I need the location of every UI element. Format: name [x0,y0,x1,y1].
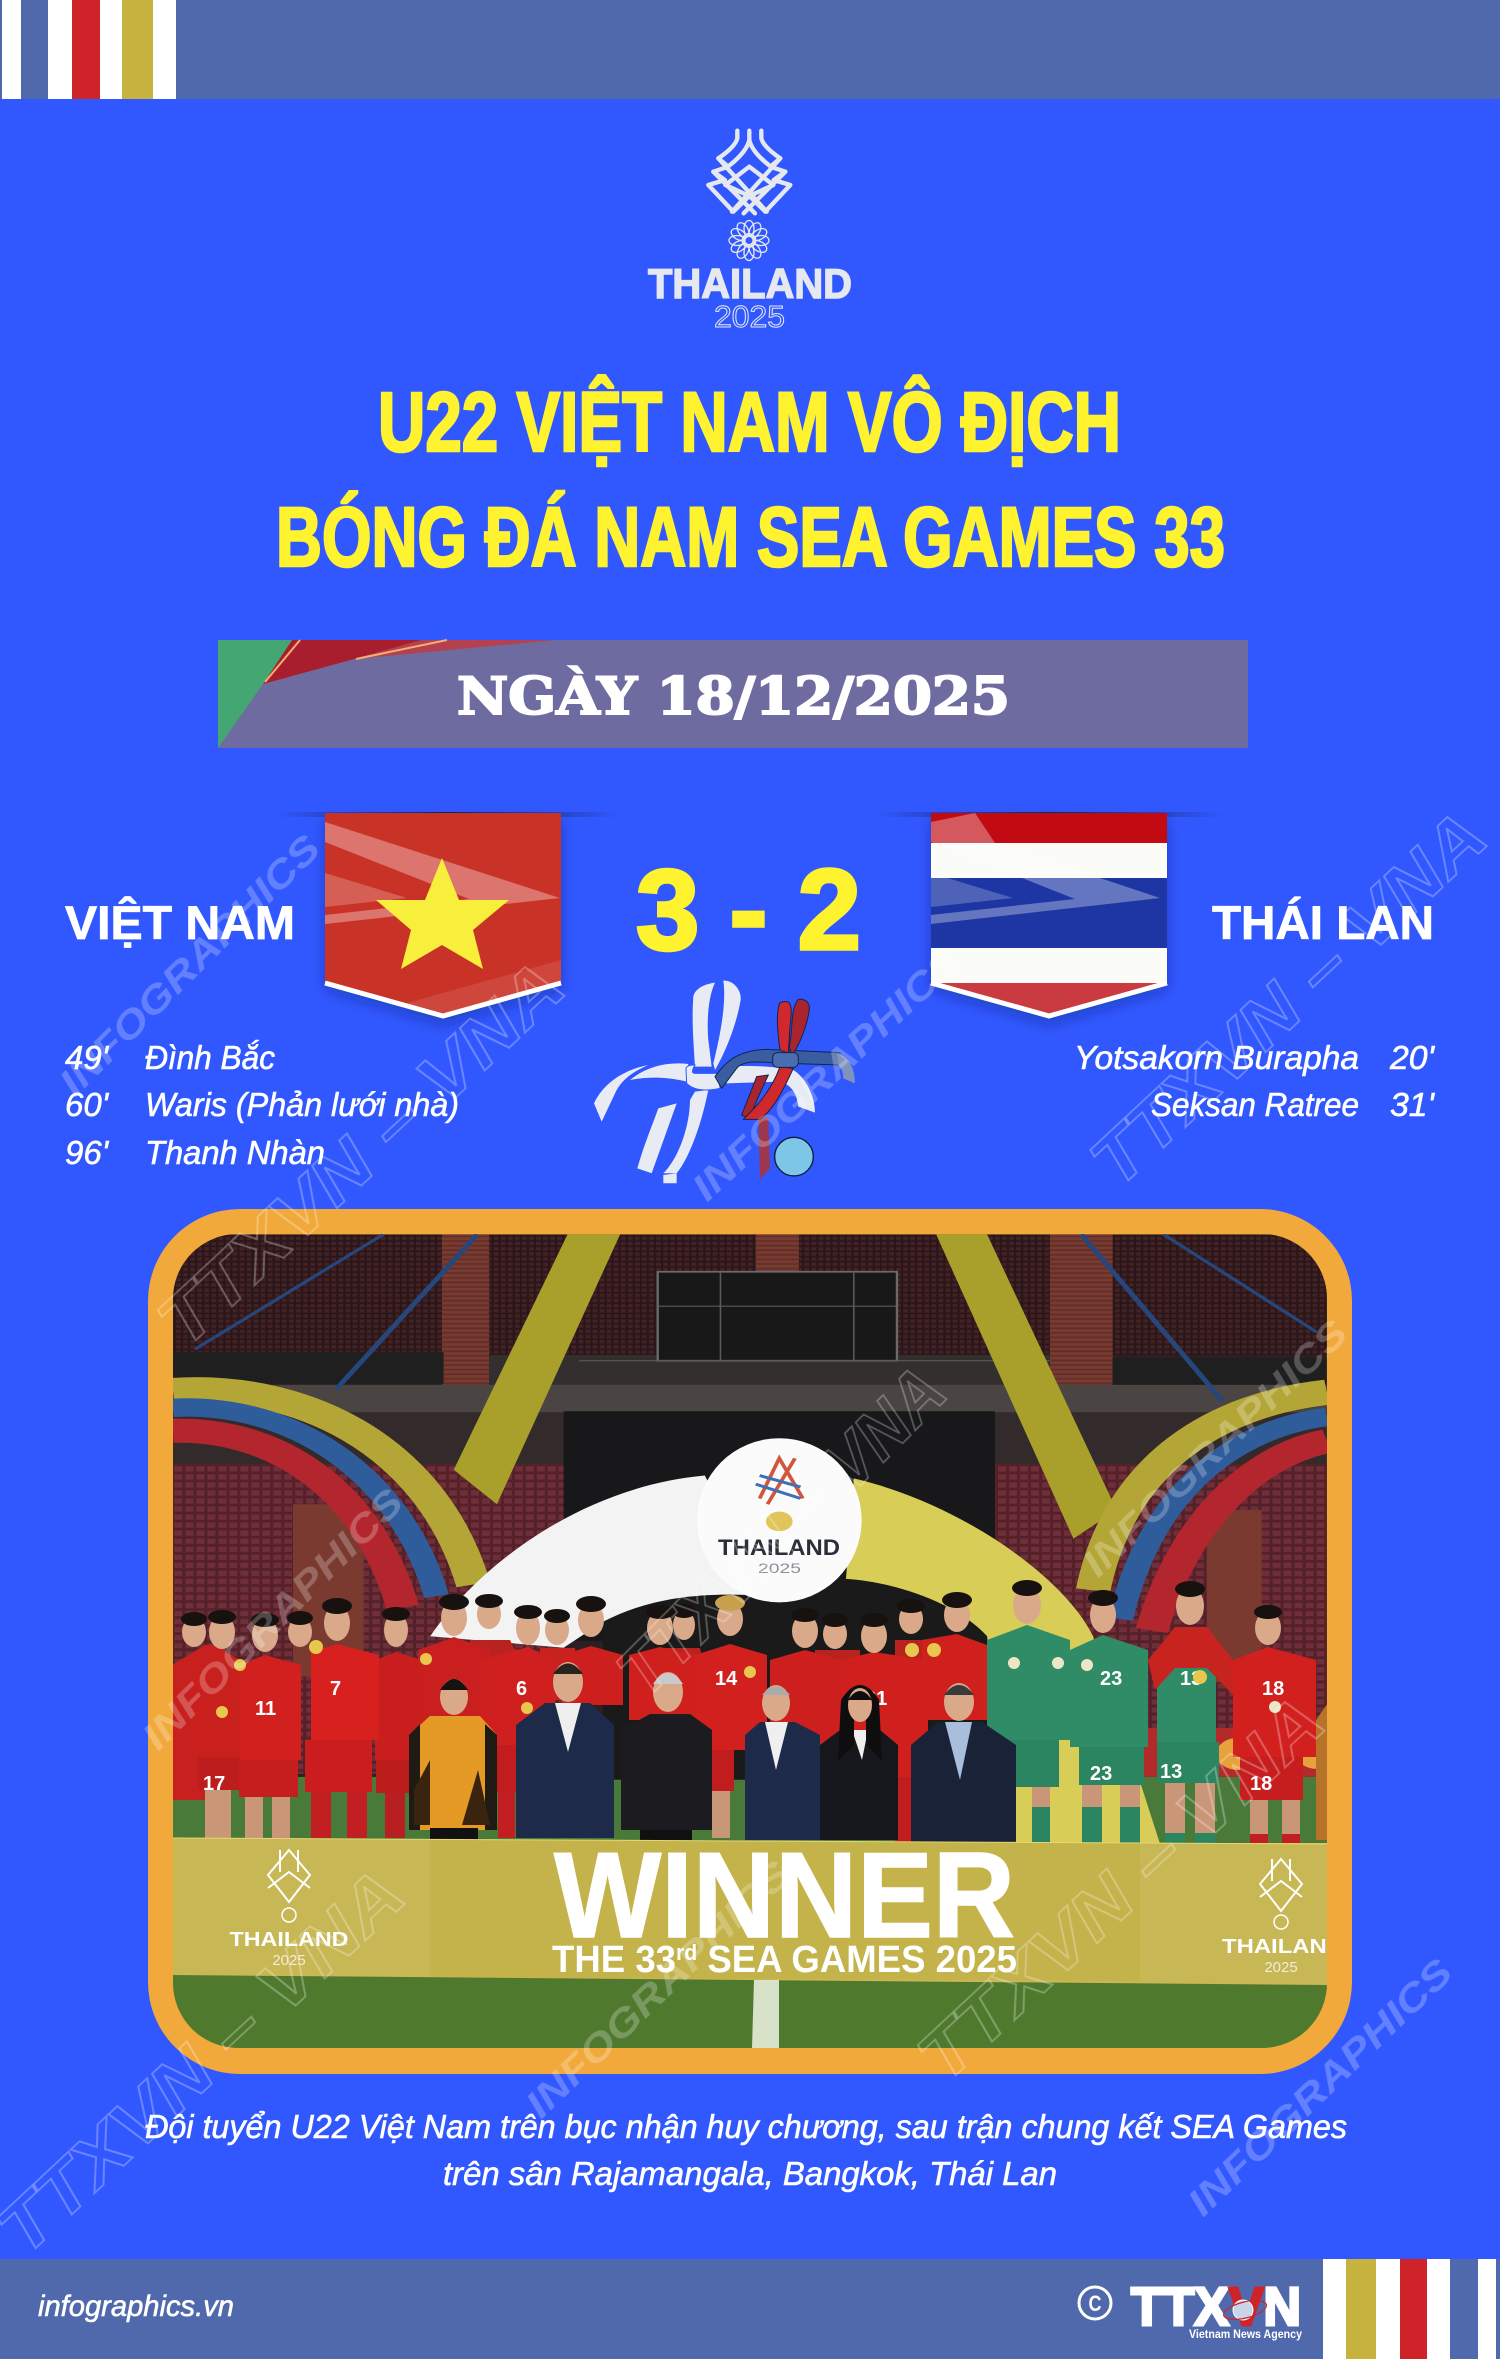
goals: Việt Nam: 96' [65,1134,110,1171]
goalkeepers and players right [987,1580,1330,1843]
title: U22 VIỆT NAM VÔ ĐỊCH [378,375,1121,469]
caption: Đội tuyển U22 Việt Nam trên bục nhận huy chương, sau trận chung kết SEA Games [145,2108,1347,2145]
medals [216,1640,941,1718]
banner logo left: 2025 [272,1952,306,1969]
goals: Việt Nam: Đình Bắc [145,1039,275,1076]
watermarks: INFOGRAPHICS [52,827,329,1104]
footer band with stripes [0,2259,1500,2359]
keeper numbers [1090,1668,1284,1795]
watermarks: TTXVN – VNA [1075,796,1500,1201]
stadium background [173,1234,1337,1843]
banner headline: WINNER [554,1827,1015,1963]
logo year: 2025 [714,299,785,334]
caption [145,2108,1347,2192]
jersey numbers: 6 [516,1678,527,1700]
jersey numbers: 17 [203,1773,225,1795]
watermarks: TTXVN – VNA [902,1681,1339,2096]
banner subheading: rd [676,1940,697,1965]
goals: Việt Nam: Waris (Phản lưới nhà) [145,1086,459,1123]
goals: Thái Lan: 31' [1390,1086,1436,1123]
banner logo right: THAILAND [1222,1936,1344,1958]
caption: trên sân Rajamangala, Bangkok, Thái Lan [443,2155,1057,2192]
goals: Việt Nam: 60' [65,1086,110,1123]
keeper numbers: 13 [1180,1668,1202,1690]
goals: Thái Lan: Yotsakorn Burapha [1074,1039,1359,1076]
date text: NGÀY 18/12/2025 [457,667,1010,727]
stage logo year: 2025 [758,1560,801,1576]
header band with stripes [0,0,1500,99]
goals: Thái Lan: Seksan Ratree [1151,1086,1359,1123]
logo flower [729,220,769,260]
jersey numbers: 14 [715,1668,738,1690]
jersey numbers: 21 [865,1688,887,1710]
keeper numbers: 18 [1262,1678,1284,1700]
goals: Thái Lan: 20' [1389,1039,1436,1076]
goals: Việt Nam: 49' [65,1039,110,1076]
watermarks: INFOGRAPHICS [135,1481,412,1758]
footer TTXVN logo: Vietnam News Agency [1189,2329,1303,2341]
star [376,858,509,969]
footer TTXVN logo: C [1088,2291,1102,2316]
banner logo left: THAILAND [230,1929,348,1951]
jersey numbers [203,1668,887,1795]
logo: Thailand 2025 [648,131,852,334]
title [276,375,1225,584]
jersey numbers: 11 [255,1698,276,1720]
logo wordmark: THAILAND [648,260,852,307]
icon: ribbons and ball [594,981,855,1183]
banner subheading: THE 33 [552,1939,681,1981]
team: Thái Lan name: THÁI LAN [1212,896,1434,949]
goals: Việt Nam: Thanh Nhàn [145,1134,325,1171]
winner banner [173,1827,1344,1985]
date banner [218,640,1248,748]
watermarks: INFOGRAPHICS [1180,1951,1461,2224]
footer TTXVN logo: TTXVN [1131,2277,1301,2337]
flag pennant: Thailand [876,812,1225,1018]
back row players [172,1594,935,1800]
photo: team on the podium [172,1234,1344,2048]
officials [409,1662,1016,1842]
watermarks: TTXVN – VNA [601,1351,961,1711]
logo lattice mark [708,131,790,213]
watermarks: INFOGRAPHICS [1075,1312,1356,1585]
flag pennant: Vietnam [273,812,622,1018]
banner logo right [1222,1858,1326,1972]
jersey numbers: 7 [330,1678,341,1700]
keeper numbers: 13 [1160,1761,1182,1783]
watermarks: INFOGRAPHICS [518,1853,799,2126]
keeper numbers: 18 [1250,1773,1272,1795]
stage arch [603,1641,987,1780]
banner logo right: 2025 [1264,1959,1298,1976]
score: 3 - 2 [636,847,861,974]
team: Việt Nam name: VIỆT NAM [65,896,295,949]
watermarks: INFOGRAPHICS [684,940,969,1210]
watermarks: TTXVN – VNA [142,946,579,1361]
photo frame [148,1209,1352,2074]
stage logo wordmark: THAILAND [718,1535,840,1560]
title: BÓNG ĐÁ NAM SEA GAMES 33 [276,490,1225,584]
keeper numbers: 23 [1090,1763,1112,1785]
watermarks [0,796,1500,2269]
banner subheading: SEA GAMES 2025 [697,1939,1017,1981]
goals: Việt Nam [65,1039,459,1171]
footer site url: infographics.vn [38,2290,234,2323]
goals: Thái Lan [1074,1039,1436,1123]
red jersey players [192,1592,987,1842]
banner logo left [230,1850,348,1969]
keeper numbers: 23 [1100,1668,1122,1690]
pitch foreground [173,1975,1327,2048]
